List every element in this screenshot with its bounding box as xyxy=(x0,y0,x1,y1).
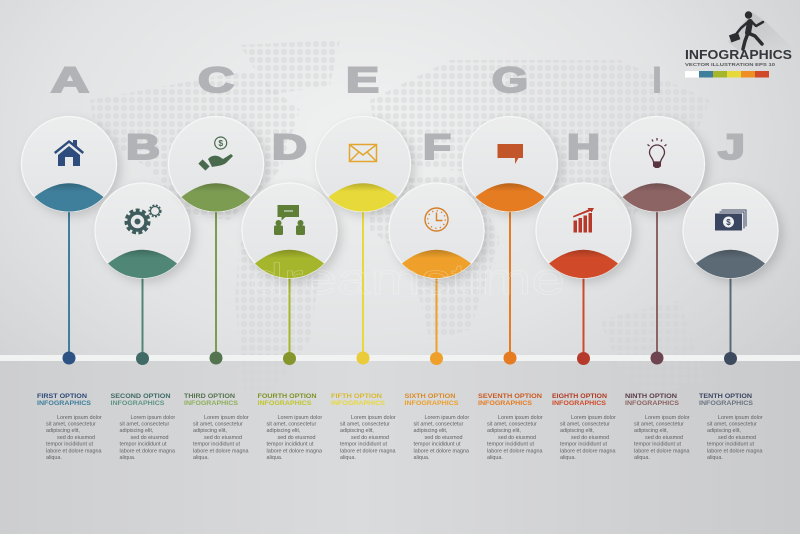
logo subtitle: VECTOR ILLUSTRATION EPS 10 xyxy=(685,62,775,68)
text block: first option: sed do eiusmod xyxy=(57,435,95,441)
text block: first option: Lorem ipsum dolor xyxy=(57,415,102,421)
text block: ninth option: tempor incididunt ut xyxy=(634,442,682,448)
logo colour bar xyxy=(685,71,769,78)
letter J: J xyxy=(718,128,745,167)
text block: tenth option: aliqua. xyxy=(707,455,723,461)
text block: seventh option: INFOGRAPHICS xyxy=(478,401,532,407)
text block: ninth option: INFOGRAPHICS xyxy=(625,401,679,407)
text block: second option: labore et dolore magna xyxy=(120,448,175,454)
text block: third option: sit amet, consectetur xyxy=(193,422,243,428)
text block: eighth option: Lorem ipsum dolor xyxy=(571,415,616,421)
text block: third option: tempor incididunt ut xyxy=(193,442,241,448)
lower band background xyxy=(0,358,800,534)
text block: first option: FIRST OPTION xyxy=(37,394,87,400)
text block: second option: Lorem ipsum dolor xyxy=(130,415,175,421)
text block: sixth option xyxy=(404,394,469,461)
text block: tenth option: adipiscing elit, xyxy=(707,428,741,434)
letter C: C xyxy=(198,61,234,100)
icon: speech bubble xyxy=(498,144,523,164)
text block: second option: tempor incididunt ut xyxy=(120,442,167,448)
icon: gears xyxy=(126,205,161,233)
text block: eighth option: INFOGRAPHICS xyxy=(552,401,606,407)
text block: fifth option: INFOGRAPHICS xyxy=(331,401,385,407)
text block: tenth option: INFOGRAPHICS xyxy=(699,401,753,407)
node B: gears xyxy=(95,183,190,365)
text block: third option: sed do eiusmod xyxy=(204,435,242,441)
text block: eighth option: tempor incididunt ut xyxy=(560,442,608,448)
node E: envelope xyxy=(316,116,410,364)
text block: sixth option: aliqua. xyxy=(414,455,429,461)
text block: first option: tempor incididunt ut xyxy=(46,442,94,448)
text block: seventh option: Lorem ipsum dolor xyxy=(498,415,543,421)
text block: first option xyxy=(37,394,102,461)
text block: eighth option: EIGHTH OPTION xyxy=(552,394,607,400)
text block: tenth option: sit amet, consectetur xyxy=(707,422,757,428)
text block: fifth option: tempor incididunt ut xyxy=(340,442,388,448)
text block: fourth option: Lorem ipsum dolor xyxy=(278,415,322,421)
icon: stack of banknotes xyxy=(715,210,746,230)
watermark: dreamstime xyxy=(250,255,565,304)
letter E: E xyxy=(346,61,379,100)
text block: fifth option: FIFTH OPTION xyxy=(331,394,382,400)
letter H: H xyxy=(567,128,600,167)
icon: house xyxy=(54,140,84,166)
icon: hand with coin: $ xyxy=(218,138,223,148)
text block: first option: aliqua. xyxy=(46,455,62,461)
text block: first option: sit amet, consectetur xyxy=(46,422,96,428)
text block: sixth option: Lorem ipsum dolor xyxy=(424,415,469,421)
logo long shadow xyxy=(728,12,795,50)
text block: sixth option: labore et dolore magna xyxy=(414,448,469,454)
text block: third option xyxy=(184,394,249,461)
text block: third option: THIRD OPTION xyxy=(184,394,235,400)
letter G: G xyxy=(492,61,528,100)
text block: seventh option: tempor incididunt ut xyxy=(487,442,535,448)
text block: first option: labore et dolore magna xyxy=(46,448,101,454)
text block: first option: adipiscing elit, xyxy=(46,428,80,434)
letter B: B xyxy=(126,128,160,167)
text block: second option: sit amet, consectetur xyxy=(120,422,169,428)
node G: speech bubble xyxy=(462,116,558,364)
text block: second option xyxy=(110,394,175,461)
logo: infographics xyxy=(685,11,795,77)
text block: third option: aliqua. xyxy=(193,455,209,461)
text block: tenth option: tempor incididunt ut xyxy=(707,442,755,448)
timeline bar xyxy=(0,355,800,361)
icon: two people talking xyxy=(274,205,305,235)
text block: eighth option: sed do eiusmod xyxy=(571,435,609,441)
text block: eighth option: adipiscing elit, xyxy=(560,428,594,434)
text block: eighth option: sit amet, consectetur xyxy=(560,422,610,428)
text block: ninth option: adipiscing elit, xyxy=(634,428,668,434)
text block: seventh option: aliqua. xyxy=(487,455,503,461)
text block: fifth option xyxy=(331,394,396,461)
icon: light bulb xyxy=(648,138,666,168)
node A: home xyxy=(22,116,116,364)
letter I: I xyxy=(653,61,661,100)
text block: ninth option xyxy=(625,394,690,461)
text block: second option: INFOGRAPHICS xyxy=(110,401,164,407)
text block: fourth option: INFOGRAPHICS xyxy=(258,401,312,407)
text block: sixth option: sed do eiusmod xyxy=(424,435,463,441)
text block: fourth option: tempor incididunt ut xyxy=(266,442,314,448)
icon: stack of banknotes: $ xyxy=(726,218,731,227)
icon: clock xyxy=(425,208,448,231)
text block: seventh option: labore et dolore magna xyxy=(487,448,542,454)
text block: seventh option: sed do eiusmod xyxy=(498,435,536,441)
text block: fourth option: sit amet, consectetur xyxy=(266,422,316,428)
text block: sixth option: adipiscing elit, xyxy=(414,428,448,434)
text block: ninth option: sit amet, consectetur xyxy=(634,422,684,428)
text block: first option: INFOGRAPHICS xyxy=(37,401,91,407)
letter D: D xyxy=(272,128,307,167)
text block: second option: adipiscing elit, xyxy=(120,428,154,434)
node J: banknotes xyxy=(683,183,778,365)
text block: tenth option: labore et dolore magna xyxy=(707,448,762,454)
text block: fifth option: aliqua. xyxy=(340,455,356,461)
text block: fifth option: adipiscing elit, xyxy=(340,428,374,434)
icon: bar chart with arrow xyxy=(573,208,594,232)
logo title: INFOGRAPHICS xyxy=(685,48,792,62)
text block: third option: labore et dolore magna xyxy=(193,448,248,454)
text block: ninth option: Lorem ipsum dolor xyxy=(645,415,690,421)
text block: fourth option: sed do eiusmod xyxy=(278,435,316,441)
text block: seventh option xyxy=(478,394,543,461)
text block: eighth option xyxy=(552,394,616,461)
text block: seventh option: sit amet, consectetur xyxy=(487,422,537,428)
node D: chat people xyxy=(242,183,337,365)
text block: fourth option: labore et dolore magna xyxy=(266,448,322,454)
text block: sixth option: sit amet, consectetur xyxy=(414,422,463,428)
text block: sixth option: INFOGRAPHICS xyxy=(404,401,458,407)
text block: third option: Lorem ipsum dolor xyxy=(204,415,249,421)
text block: fourth option: adipiscing elit, xyxy=(266,428,301,434)
icon: envelope xyxy=(350,144,376,162)
text block: tenth option: sed do eiusmod xyxy=(718,435,756,441)
text block: seventh option: SEVENTH OPTION xyxy=(478,394,542,400)
text block: fifth option: Lorem ipsum dolor xyxy=(351,415,396,421)
text block: tenth option xyxy=(699,394,763,461)
text block: fourth option: aliqua. xyxy=(266,455,282,461)
text block: second option: aliqua. xyxy=(120,455,135,461)
text block: seventh option: adipiscing elit, xyxy=(487,428,521,434)
letter A: A xyxy=(51,61,89,100)
icon: hand with coin xyxy=(198,137,233,171)
text block: eighth option: labore et dolore magna xyxy=(560,448,615,454)
node F: clock xyxy=(389,183,484,365)
text block: eighth option: aliqua. xyxy=(560,455,576,461)
text block: tenth option: TENTH OPTION xyxy=(699,394,752,400)
text block: second option: SECOND OPTION xyxy=(110,394,170,400)
node H: growth chart xyxy=(536,183,631,365)
dotted world map xyxy=(90,40,710,395)
text block: fifth option: sed do eiusmod xyxy=(351,435,389,441)
text block: fifth option: sit amet, consectetur xyxy=(340,422,390,428)
letter F: F xyxy=(423,128,451,167)
text block: sixth option: SIXTH OPTION xyxy=(404,394,456,400)
node C: money hand xyxy=(168,116,264,364)
text block: sixth option: tempor incididunt ut xyxy=(414,442,461,448)
icon: running businessman xyxy=(729,11,763,49)
text block: third option: INFOGRAPHICS xyxy=(184,401,238,407)
text block: ninth option: labore et dolore magna xyxy=(634,448,689,454)
text block: ninth option: aliqua. xyxy=(634,455,650,461)
text block: fourth option xyxy=(258,394,322,461)
text block: fifth option: labore et dolore magna xyxy=(340,448,395,454)
text block: ninth option: NINTH OPTION xyxy=(625,394,677,400)
text block: third option: adipiscing elit, xyxy=(193,428,227,434)
text block: fourth option: FOURTH OPTION xyxy=(258,394,316,400)
text block: tenth option: Lorem ipsum dolor xyxy=(718,415,763,421)
text block: ninth option: sed do eiusmod xyxy=(645,435,683,441)
text block: second option: sed do eiusmod xyxy=(130,435,169,441)
node I: light bulb xyxy=(610,116,704,364)
